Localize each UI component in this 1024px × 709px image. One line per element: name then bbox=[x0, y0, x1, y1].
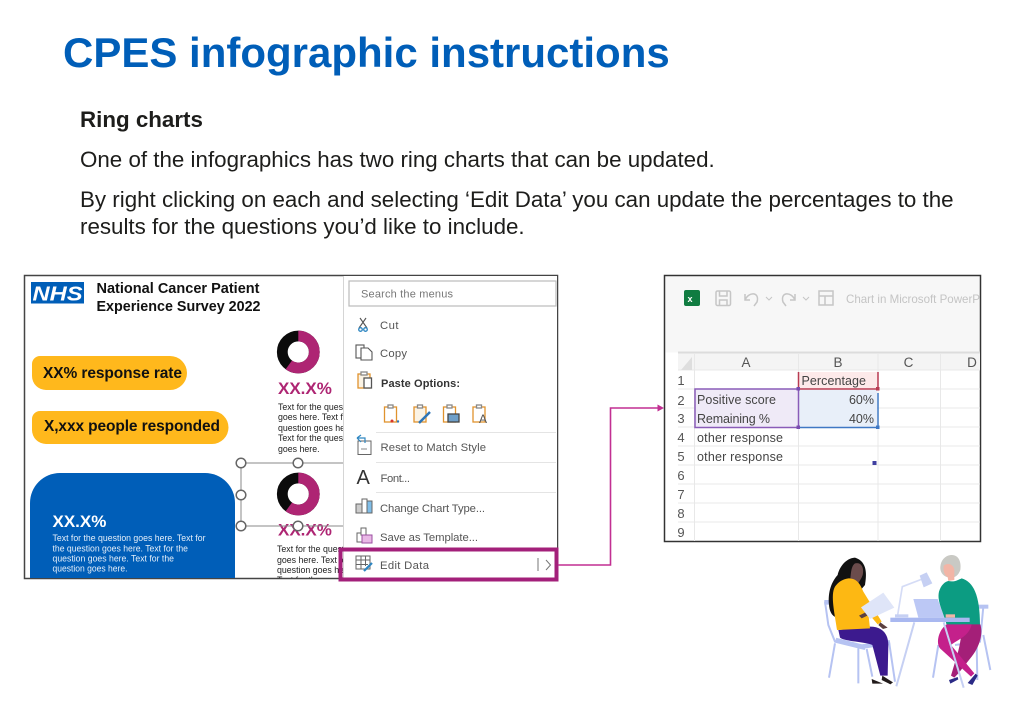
left chair bbox=[824, 602, 895, 683]
panel: PowerPoint screenshot bbox=[24, 276, 558, 600]
menu item labels: Edit Data bbox=[380, 560, 430, 572]
heading: survey name: National Cancer Patient bbox=[96, 281, 260, 297]
column headers: C bbox=[904, 355, 914, 370]
text: top ring description: Text for the question bbox=[278, 402, 357, 412]
row numbers: 3 bbox=[677, 411, 685, 426]
desk bbox=[890, 618, 970, 688]
icon: copy bbox=[356, 345, 372, 360]
cell text: Percentage bbox=[802, 374, 866, 388]
row numbers: 2 bbox=[677, 393, 685, 408]
text block: instructions bbox=[80, 187, 954, 239]
icon: submenu chevron bbox=[538, 558, 550, 571]
row numbers bbox=[677, 373, 685, 540]
text: top ring description: goes here. Text for the bbox=[278, 412, 365, 422]
cell text bbox=[697, 374, 874, 464]
icon: change chart type bbox=[356, 499, 372, 513]
menu item labels bbox=[380, 320, 486, 572]
column headers bbox=[741, 355, 977, 370]
panel: blue statistic: the question goes here. Text for the bbox=[52, 544, 188, 554]
laptop bbox=[913, 599, 944, 618]
text: bottom ring description: Text for the question bbox=[277, 544, 356, 554]
text block: instructions: By right clicking on each and selecting ‘Edit Data’ you can update the percentages to the bbox=[80, 187, 954, 212]
cell text: Remaining % bbox=[697, 412, 770, 426]
menu item labels: Change Chart Type... bbox=[380, 503, 485, 515]
text: top ring description: Text for the question bbox=[278, 433, 357, 443]
chart: bottom ring bbox=[282, 478, 314, 510]
row numbers: 9 bbox=[677, 525, 685, 540]
menu item labels: Save as Template... bbox=[380, 532, 478, 544]
left woman hands bbox=[859, 611, 888, 629]
right woman hand bbox=[946, 614, 955, 618]
column headers: A bbox=[741, 355, 751, 370]
callout: people responded: X,xxx people responded bbox=[44, 418, 220, 435]
icon: excel: x bbox=[688, 294, 693, 304]
icon: save template bbox=[357, 528, 372, 543]
heading: ring charts: Ring charts bbox=[80, 107, 203, 132]
text: top ring description: goes here. bbox=[278, 444, 320, 454]
arrow: edit data to spreadsheet bbox=[558, 404, 664, 565]
text: bottom ring description: question goes here. bbox=[277, 565, 354, 575]
illustration: two women at a desk bbox=[824, 555, 990, 688]
callout: edit data highlight bbox=[340, 550, 556, 580]
panel: blue statistic: Text for the question goes here. Text for bbox=[52, 533, 206, 543]
right chair bbox=[933, 607, 990, 680]
text: bottom ring value: XX.X% bbox=[278, 520, 332, 540]
icon: scissors bbox=[359, 318, 367, 331]
row numbers: 6 bbox=[677, 468, 685, 483]
left woman jumper bbox=[833, 578, 882, 630]
document bbox=[861, 593, 894, 619]
desk lamp bbox=[895, 572, 932, 617]
menu item labels: Paste Options: bbox=[381, 378, 460, 390]
menu item labels: Font... bbox=[380, 473, 410, 485]
text block: intro: One of the infographics has two ring charts that can be updated. bbox=[80, 147, 715, 172]
heading: survey name bbox=[96, 281, 260, 315]
range highlights bbox=[695, 372, 880, 465]
callout: response rate bbox=[32, 356, 187, 390]
text: window title: Chart in Microsoft PowerP bbox=[846, 292, 980, 306]
row numbers: 8 bbox=[677, 506, 685, 521]
row numbers: 1 bbox=[677, 373, 685, 388]
left woman hair bbox=[829, 558, 866, 618]
search box bbox=[349, 281, 556, 306]
row numbers: 5 bbox=[677, 449, 685, 464]
left woman legs bbox=[838, 627, 888, 676]
column headers: D bbox=[967, 355, 977, 370]
icon: paste bbox=[358, 372, 372, 388]
search box: Search the menus bbox=[361, 288, 454, 300]
right woman dark leg bbox=[951, 624, 981, 678]
menu item labels: Cut bbox=[380, 320, 399, 332]
right woman hair bbox=[940, 555, 961, 578]
left woman shoes bbox=[872, 676, 893, 684]
panel: blue statistic: XX.X% bbox=[52, 512, 106, 531]
icon: reset bbox=[357, 435, 371, 454]
right woman jumper bbox=[939, 578, 980, 625]
icon: paste text letter: A bbox=[479, 412, 487, 426]
left woman face and neck bbox=[850, 563, 863, 586]
panel: context menu bbox=[344, 276, 557, 578]
text: top ring value: XX.X% bbox=[278, 379, 332, 398]
menu separators bbox=[376, 432, 556, 492]
callout: response rate: XX% response rate bbox=[43, 365, 182, 382]
right woman shoes bbox=[949, 674, 978, 685]
panel: blue statistic: question goes here. Text for the bbox=[52, 554, 174, 564]
heading: survey name: Experience Survey 2022 bbox=[96, 299, 260, 315]
panel: blue statistic bbox=[30, 473, 235, 578]
column headers: B bbox=[833, 355, 843, 370]
icon: excel bbox=[684, 290, 700, 306]
right woman light leg bbox=[938, 624, 974, 677]
icons: quick access bbox=[716, 291, 833, 306]
spreadsheet grid bbox=[678, 352, 980, 541]
text: top ring description: question goes here. bbox=[278, 423, 355, 433]
selection handles bbox=[236, 458, 345, 531]
cell text: Positive score bbox=[697, 393, 776, 407]
cell text: 60% bbox=[849, 393, 874, 407]
title: CPES infographic instructions bbox=[63, 29, 670, 76]
cell text: other response bbox=[697, 450, 783, 464]
row numbers: 4 bbox=[677, 430, 685, 445]
text block: instructions: results for the questions you’d like to include. bbox=[80, 214, 525, 239]
chart: top ring bbox=[282, 336, 314, 368]
text: bottom ring description: goes here. Text for the bbox=[277, 555, 364, 565]
right woman face bbox=[943, 564, 954, 581]
icon: edit data bbox=[356, 556, 372, 571]
menu item labels: Reset to Match Style bbox=[380, 442, 486, 454]
Excel toolbar bbox=[666, 276, 980, 352]
menu item labels: Copy bbox=[380, 348, 407, 360]
callout: people responded bbox=[32, 411, 228, 444]
panel: Excel screenshot bbox=[664, 276, 980, 542]
row numbers: 7 bbox=[677, 487, 685, 502]
text: bottom ring description: Text for the question bbox=[277, 575, 356, 585]
icons: paste options bbox=[384, 405, 485, 423]
cell text: 40% bbox=[849, 412, 874, 426]
cell text: other response bbox=[697, 431, 783, 445]
panel: blue statistic: question goes here. bbox=[52, 564, 128, 574]
icon: font: A bbox=[356, 467, 370, 489]
icon: NHS logo: NHS bbox=[32, 282, 83, 306]
